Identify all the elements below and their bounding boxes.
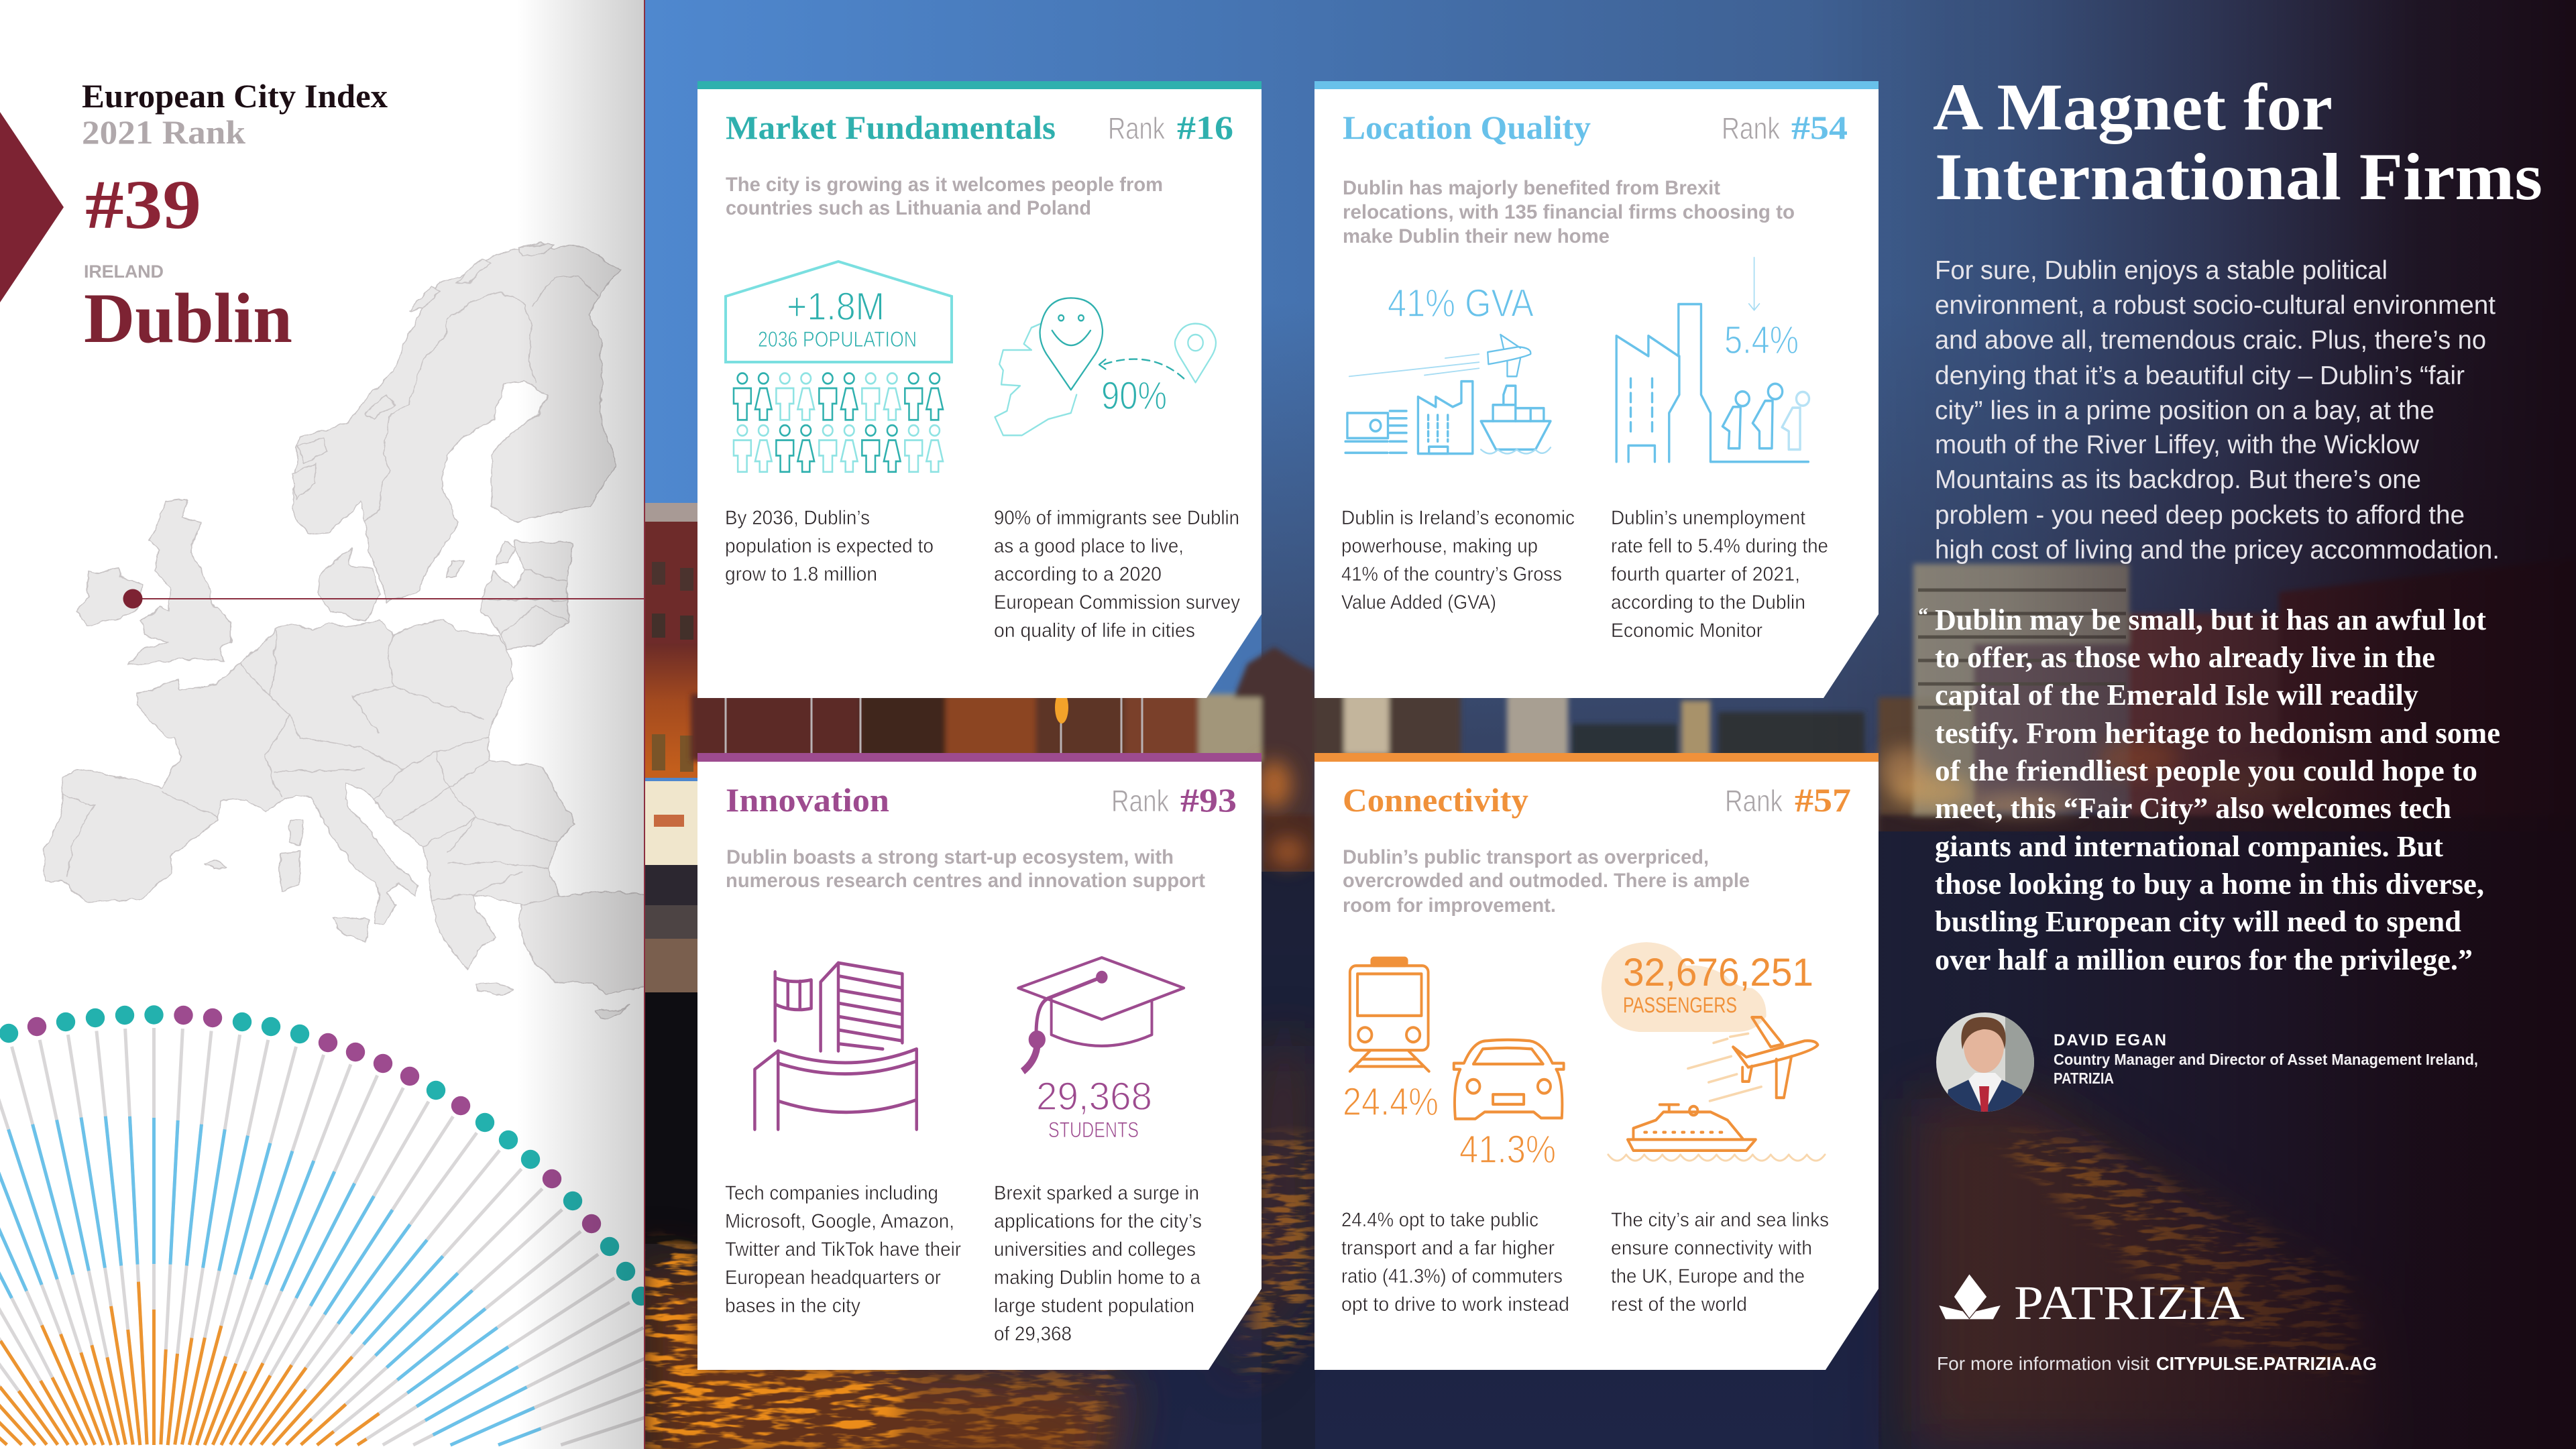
body text left <box>1341 1209 1569 1316</box>
body text left: Tech companies including <box>725 1182 938 1204</box>
body text right: The city’s air and sea links <box>1611 1209 1829 1231</box>
quote: giants and international companies. But <box>1935 830 2443 863</box>
website link line: CITYPULSE.PATRIZIA.AG <box>2156 1353 2377 1374</box>
country label: IRELAND <box>84 262 164 282</box>
attribution: Country Manager and Director of Asset Management Ireland, <box>2054 1051 2478 1068</box>
rays: grey base <box>0 1028 685 1445</box>
title: A Magnet for <box>1933 70 2333 144</box>
rays: blue segments <box>0 1116 541 1445</box>
body text right: 90% of immigrants see Dublin <box>994 507 1239 529</box>
body text right: Brexit sparked a surge in <box>994 1182 1199 1204</box>
rank <box>1108 109 1233 146</box>
body text left: transport and a far higher <box>1341 1237 1555 1259</box>
body text left: European headquarters or <box>725 1267 941 1289</box>
quote: over half a million euros for the privilege.” <box>1935 943 2473 976</box>
body text left: opt to drive to work instead <box>1341 1293 1569 1316</box>
rank: Rank <box>1725 784 1783 818</box>
summary text: relocations, with 135 financial firms choosing to <box>1343 201 1795 223</box>
intro paragraph: city” lies in a prime position on a bay, at the <box>1935 396 2434 425</box>
map of Europe <box>44 242 647 1019</box>
quote: meet, this “Fair City” also welcomes tech <box>1935 792 2451 825</box>
quote: Dublin may be small, but it has an awful lot <box>1935 603 2486 636</box>
body text right: applications for the city’s <box>994 1210 1202 1232</box>
rank number: #39 <box>85 166 201 243</box>
dots ring <box>0 1005 651 1306</box>
body text left: Dublin is Ireland’s economic <box>1341 507 1575 529</box>
intro paragraph: environment, a robust socio-cultural environment <box>1935 291 2496 320</box>
icon: people rows <box>734 373 943 472</box>
background photo: Dublin river at dusk <box>645 0 2576 1449</box>
rank <box>1725 781 1851 819</box>
body text right: as a good place to live, <box>994 535 1184 557</box>
icon: ferry on waves <box>1608 1104 1825 1161</box>
icon: graduation cap <box>1018 958 1184 1071</box>
body text left: population is expected to <box>725 535 934 557</box>
icon: train <box>1350 958 1429 1071</box>
icon: plane, money, factory, ship <box>1345 335 1551 454</box>
street lights <box>1257 740 2334 866</box>
body text left: bases in the city <box>725 1295 860 1317</box>
quote: “ <box>1918 604 1928 626</box>
intro paragraph: and above all, tremendous craic. Plus, there’s no <box>1935 326 2486 355</box>
summary text <box>1343 177 1795 247</box>
quote: those looking to buy a home in this diverse, <box>1935 868 2484 901</box>
panel: Innovation <box>697 753 1262 1370</box>
rank: #16 <box>1177 109 1233 146</box>
quote: to offer, as those who already live in the <box>1935 641 2435 674</box>
quote: testify. From heritage to hedonism and some <box>1935 717 2500 750</box>
body text right <box>994 507 1240 642</box>
portrait of David Egan <box>1936 1012 2034 1113</box>
intro paragraph <box>1935 256 2500 565</box>
left buildings <box>645 503 706 1247</box>
summary text: numerous research centres and innovation support <box>726 870 1205 892</box>
heading: Innovation <box>726 781 889 819</box>
summary text: Dublin has majorly benefited from Brexit <box>1343 177 1720 199</box>
heading: Connectivity <box>1343 781 1528 819</box>
body text right <box>1611 1209 1829 1316</box>
heading: 2021 Rank: 2021 Rank <box>82 113 245 151</box>
intro paragraph: problem - you need deep pockets to afford the <box>1935 501 2465 530</box>
icon: house with population: 2036 POPULATION <box>758 327 917 351</box>
panel: left white map panel <box>0 0 685 1449</box>
website link line: For more information visit <box>1937 1353 2149 1374</box>
stats: commuting shares: 24.4% <box>1343 1080 1439 1124</box>
radial chart: sunburst of rays with category dots <box>0 1005 685 1445</box>
body text right: according to a 2020 <box>994 563 1162 585</box>
intro paragraph: high cost of living and the pricey accommodation. <box>1935 536 2500 565</box>
quote: capital of the Emerald Isle will readily <box>1935 679 2418 711</box>
attribution: PATRIZIA <box>2054 1069 2114 1087</box>
summary text <box>726 846 1205 892</box>
summary text <box>726 174 1163 219</box>
panel: Market Fundamentals <box>697 81 1262 698</box>
body text right: of 29,368 <box>994 1323 1072 1345</box>
stat: 41% GVA: 41% GVA <box>1388 282 1534 325</box>
stat: 5.4%: 5.4% <box>1724 318 1799 362</box>
panel: right column article <box>1918 70 2542 1374</box>
body text left: Value Added (GVA) <box>1341 591 1496 614</box>
body text right: fourth quarter of 2021, <box>1611 563 1800 585</box>
panel: Location Quality <box>1314 81 1879 698</box>
attribution: DAVID EGAN <box>2054 1031 2166 1049</box>
body text left: grow to 1.8 million <box>725 563 877 585</box>
body text right: large student population <box>994 1295 1194 1317</box>
right buildings <box>1879 558 2576 902</box>
location dot: Dublin <box>123 589 142 609</box>
body text right: Economic Monitor <box>1611 620 1762 642</box>
rays: orange segments <box>0 1282 379 1445</box>
icon: house with population: +1.8M <box>787 285 885 329</box>
quote: of the friendliest people you could hope to <box>1935 754 2477 787</box>
river reflections <box>645 1046 2388 1449</box>
pointer triangle <box>0 112 64 302</box>
city name: Dublin <box>84 279 292 357</box>
attribution <box>2054 1031 2478 1087</box>
body text right <box>994 1182 1202 1345</box>
river water <box>706 872 2576 1449</box>
body text left: ratio (41.3%) of commuters <box>1341 1265 1563 1287</box>
summary text: make Dublin their new home <box>1343 225 1610 247</box>
logo: PATRIZIA: PATRIZIA <box>2014 1276 2245 1330</box>
title: International Firms <box>1935 139 2542 214</box>
strip of buildings between upper and lower cards <box>691 647 1932 959</box>
summary text: Dublin’s public transport as overpriced, <box>1343 846 1709 868</box>
icon: Ireland map with smiling pin <box>995 298 1216 435</box>
stats: commuting shares: 41.3% <box>1459 1128 1556 1171</box>
stat: 29,368 students: STUDENTS <box>1048 1118 1139 1142</box>
rank: #93 <box>1180 781 1237 819</box>
heading: Location Quality <box>1343 109 1591 146</box>
body text right: ensure connectivity with <box>1611 1237 1812 1259</box>
stat: passengers <box>1623 951 1813 1017</box>
icon: flag, tower and campus <box>754 963 917 1129</box>
panel: Connectivity <box>1314 753 1879 1370</box>
title <box>1933 70 2542 214</box>
panel edge line <box>644 0 645 1449</box>
heading: European City Index: European City Index <box>82 77 388 115</box>
heading: Market Fundamentals <box>726 109 1056 146</box>
colour overlay <box>1811 0 2576 1449</box>
stat: passengers: PASSENGERS <box>1623 993 1737 1017</box>
body text left <box>725 507 934 585</box>
body text left: 41% of the country’s Gross <box>1341 563 1562 585</box>
body text left <box>725 1182 961 1317</box>
stats: commuting shares <box>1343 1080 1556 1171</box>
rank: Rank <box>1722 111 1780 146</box>
intro paragraph: Mountains as its backdrop. But there’s one <box>1935 465 2421 494</box>
body text right: making Dublin home to a <box>994 1267 1200 1289</box>
body text right: the UK, Europe and the <box>1611 1265 1805 1287</box>
body text right: on quality of life in cities <box>994 620 1195 642</box>
location line <box>133 598 644 599</box>
icon: aeroplane <box>1688 1017 1817 1101</box>
body text right <box>1611 507 1828 642</box>
rank <box>1722 109 1848 146</box>
summary text: overcrowded and outmoded. There is ample <box>1343 870 1750 892</box>
summary text: countries such as Lithuania and Poland <box>726 197 1091 219</box>
body text right: universities and colleges <box>994 1238 1196 1261</box>
stat: passengers: 32,676,251 <box>1623 951 1813 994</box>
rank: Rank <box>1111 784 1169 818</box>
body text right: Dublin’s unemployment <box>1611 507 1806 529</box>
website link line <box>1937 1353 2377 1374</box>
body text left: Twitter and TikTok have their <box>725 1238 961 1261</box>
rank: Rank <box>1108 111 1165 146</box>
body text right: rate fell to 5.4% during the <box>1611 535 1828 557</box>
stat: 90%: 90% <box>1101 374 1167 418</box>
body text right: according to the Dublin <box>1611 591 1805 614</box>
rank: #54 <box>1791 109 1848 146</box>
icon: cloud <box>1602 942 1767 1032</box>
body text left: By 2036, Dublin’s <box>725 507 870 529</box>
quote: bustling European city will need to spend <box>1935 905 2461 938</box>
body text left <box>1341 507 1575 614</box>
rank: #57 <box>1795 781 1851 819</box>
summary text <box>1343 846 1750 917</box>
body text left: 24.4% opt to take public <box>1341 1209 1538 1231</box>
body text right: rest of the world <box>1611 1293 1747 1316</box>
logo: PATRIZIA <box>1939 1274 2245 1330</box>
intro paragraph: For sure, Dublin enjoys a stable political <box>1935 256 2388 285</box>
quote <box>1918 603 2500 976</box>
summary text: room for improvement. <box>1343 894 1556 917</box>
stat: 29,368 students: 29,368 <box>1036 1075 1152 1118</box>
summary text: The city is growing as it welcomes people from <box>726 174 1163 196</box>
icon: unemployment factory and people <box>1616 257 1809 462</box>
rank <box>1111 781 1237 819</box>
body text left: powerhouse, making up <box>1341 535 1538 557</box>
intro paragraph: mouth of the River Liffey, with the Wicklow <box>1935 430 2420 459</box>
stat: 29,368 students <box>1036 1075 1152 1142</box>
icon: house with population <box>726 262 952 362</box>
body text right: European Commission survey <box>994 591 1240 614</box>
summary text: Dublin boasts a strong start-up ecosystem, with <box>726 846 1174 868</box>
body text left: Microsoft, Google, Amazon, <box>725 1210 954 1232</box>
intro paragraph: denying that it’s a beautiful city – Dublin’s “fair <box>1935 361 2465 390</box>
icon: car <box>1454 1040 1564 1119</box>
